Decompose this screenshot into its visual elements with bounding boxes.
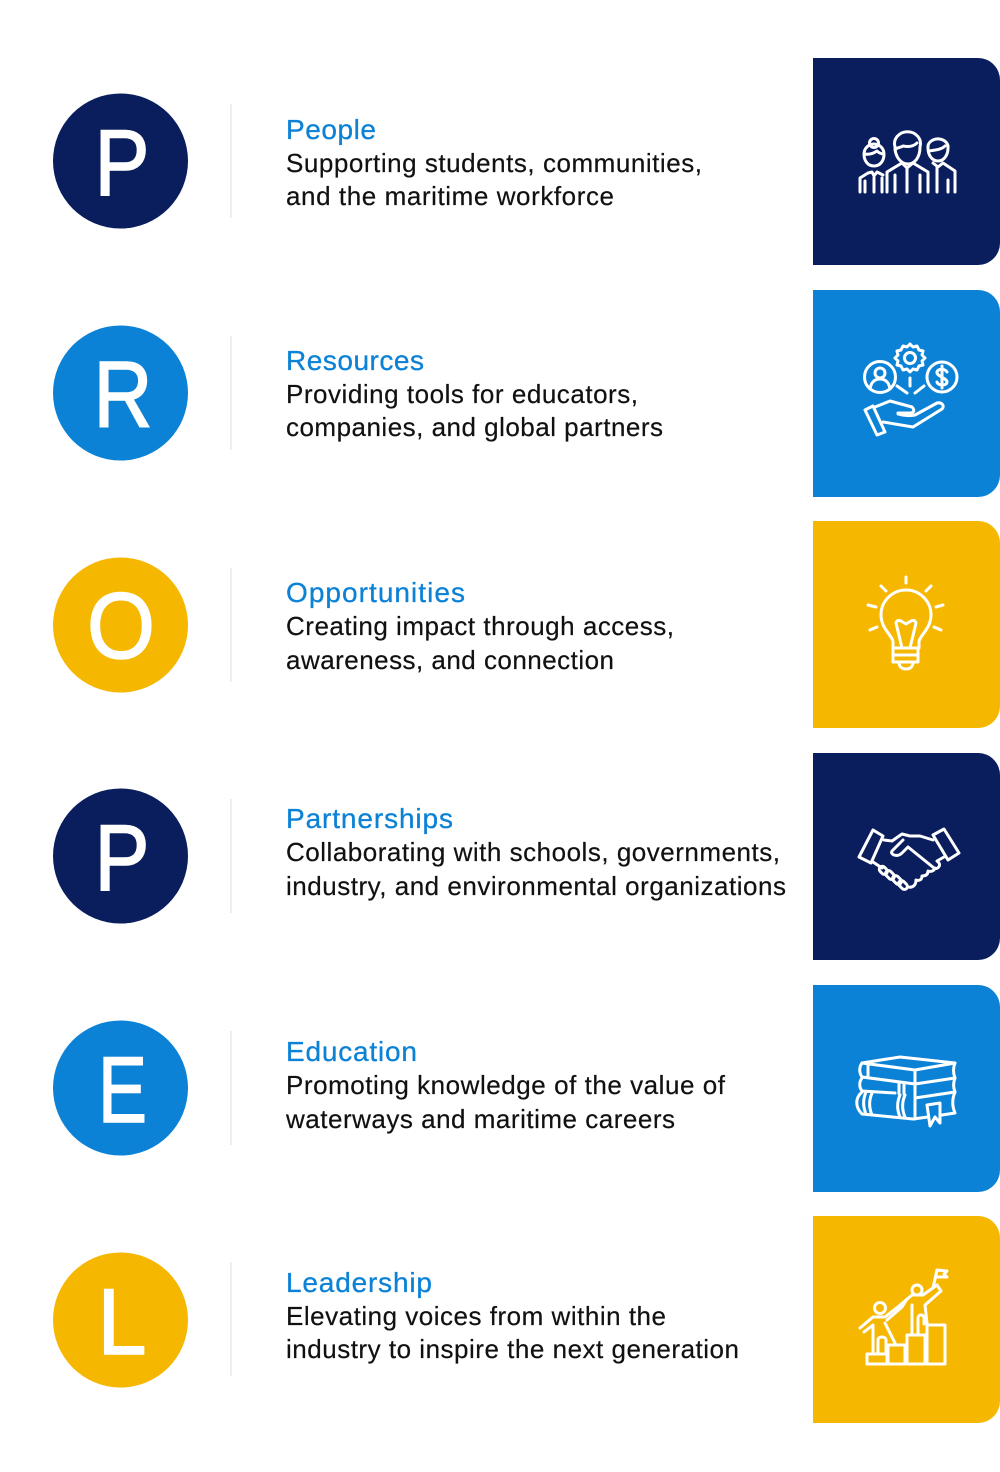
row: Leadership [53,1216,1000,1423]
panel: education icon [813,985,1000,1192]
text block: Partnerships: Partnerships [286,803,453,834]
row: People [53,58,1000,265]
icon: light bulb [868,577,943,669]
text block: Leadership: Elevating voices from within the [286,1301,666,1331]
panel: partnerships icon [813,753,1000,960]
row: Education [53,985,1000,1192]
text block: Opportunities: awareness, and connection [286,645,614,675]
text block: Resources: Providing tools for educators, [286,379,638,409]
text block: Leadership: Leadership [286,1267,432,1298]
text block: Opportunities [286,577,674,675]
text block: Partnerships [286,803,786,901]
text block: Opportunities: Creating impact through access, [286,611,674,641]
row: Opportunities [53,521,1000,728]
text block: Leadership: industry to inspire the next generation [286,1334,739,1364]
circle letter L [53,1252,188,1388]
panel: opportunities icon [813,521,1000,728]
icon: stack of books [857,1057,955,1126]
icon: three people [860,132,955,192]
text block: Partnerships: industry, and environmental organizations [286,871,786,901]
circle letter E: E [98,1037,147,1142]
panel: people icon [813,58,1000,265]
circle letter O: O [87,573,155,678]
text block: Education [285,1036,726,1134]
circle letter E [53,1020,188,1156]
icon: handshake [859,829,959,891]
panel: resources icon [813,290,1000,497]
panel: leadership icon [813,1216,1000,1423]
text block: Resources [286,345,663,442]
circle letter L: L [98,1269,146,1374]
circle letter P: P [94,805,150,910]
circle letter O [53,558,188,692]
row: Partnerships [53,753,1000,960]
circle letter P [53,94,188,228]
text block: Leadership [286,1267,739,1364]
circle letter R: R [94,342,152,447]
circle letter R [53,326,188,460]
circle letter P [53,788,188,924]
text block: People [286,114,702,211]
text block: People: People [286,114,376,145]
circle letter P: P [94,110,150,215]
text block: Education: waterways and maritime careers [285,1104,675,1134]
text block: Partnerships: Collaborating with schools, governments, [286,837,780,867]
text block: Resources: companies, and global partners [286,412,663,442]
text block: Education: Promoting knowledge of the value of [286,1070,726,1100]
text block: Education: Education [286,1036,417,1067]
text block: Opportunities: Opportunities [286,577,465,608]
icon: people climbing bars with flag [860,1270,947,1364]
text block: Resources: Resources [286,345,424,376]
text block: People: Supporting students, communities, [286,148,702,178]
row: Resources [53,290,1000,497]
icon: hand with gear, person and dollar [864,344,957,435]
text block: People: and the maritime workforce [286,181,614,211]
